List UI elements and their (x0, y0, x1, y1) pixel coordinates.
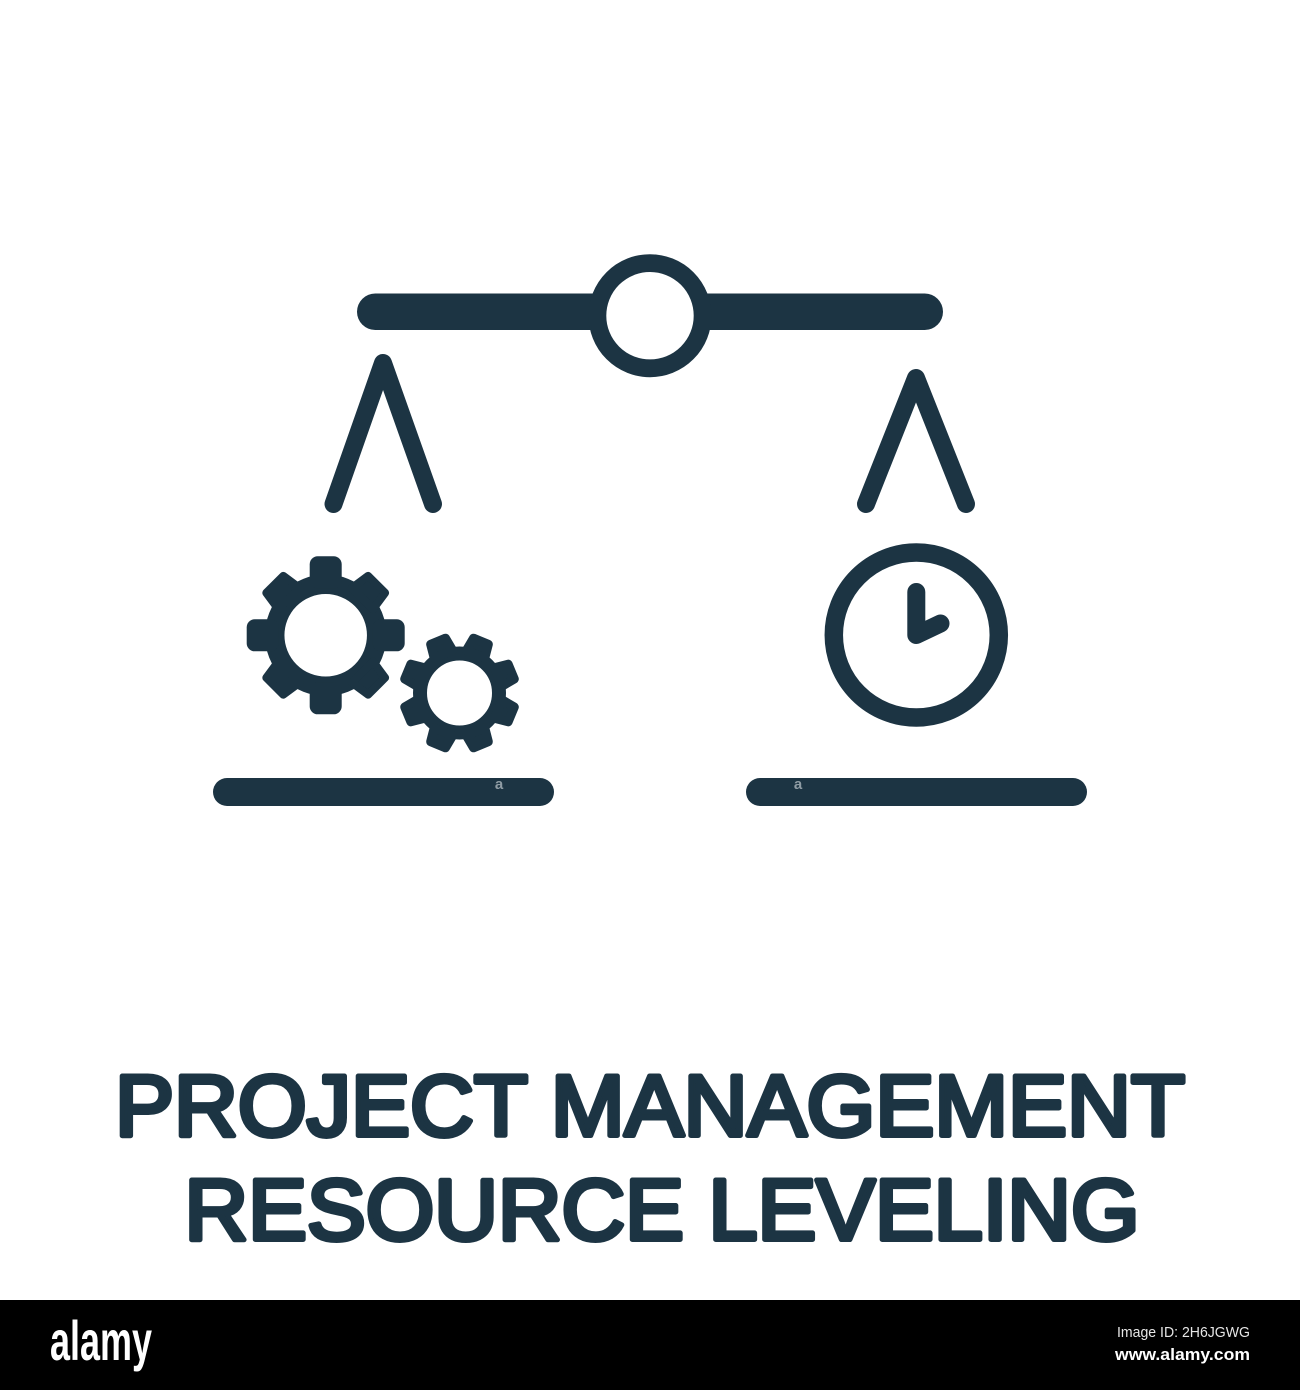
scale beam (357, 294, 943, 330)
watermark marks on pans: a (495, 776, 504, 793)
watermark marks on pans: a (794, 776, 803, 793)
alamy logo: alamy (50, 1309, 152, 1372)
footer bar (0, 1300, 1300, 1390)
left hanger (334, 363, 433, 504)
website: www.alamy.com (1114, 1345, 1250, 1364)
icon: clock (834, 552, 999, 718)
scale pivot circle (597, 263, 703, 368)
left pan (213, 778, 554, 806)
title line 1: PROJECT MANAGEMENT (115, 1058, 1185, 1154)
right pan (746, 778, 1087, 806)
title line 2: RESOURCE LEVELING (184, 1162, 1140, 1258)
title (115, 1058, 1185, 1258)
right hanger (866, 378, 966, 504)
icon: small gear (404, 637, 515, 749)
watermark marks on pans (495, 776, 803, 793)
icon: balance scale (213, 263, 1087, 806)
image id: Image ID: 2H6JGWG (1117, 1324, 1250, 1341)
icon: large gear (247, 556, 405, 714)
